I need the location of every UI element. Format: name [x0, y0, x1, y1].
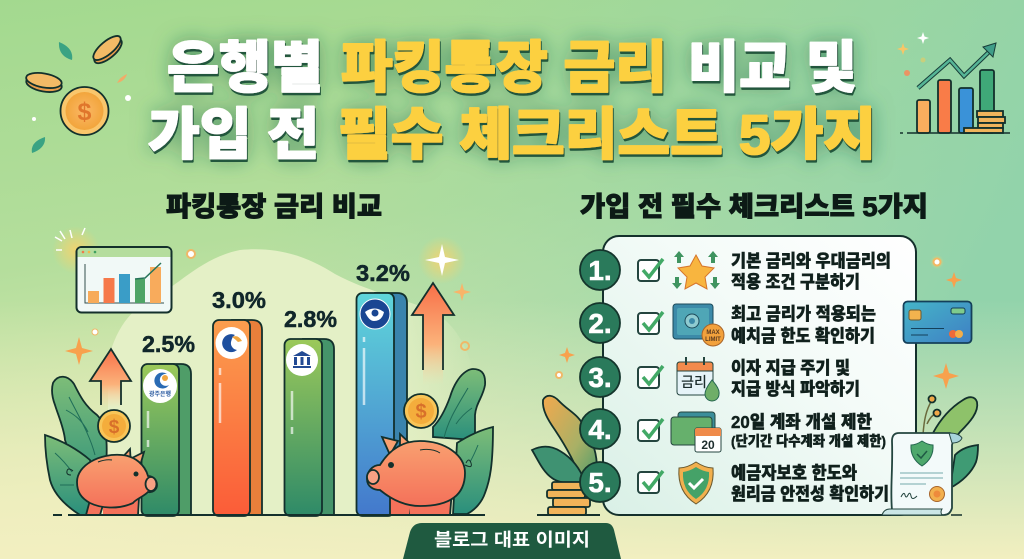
item 5: 예금자보호 한도와 [731, 463, 857, 483]
leaves left [45, 377, 107, 515]
background hill [108, 249, 480, 515]
coin right [404, 394, 438, 428]
title [148, 36, 876, 166]
item 3: 지급 방식 파악하기 [731, 379, 860, 399]
item 3: 금리 [681, 374, 707, 390]
title: 필수 체크리스트 5가지 [338, 103, 876, 166]
item 5: 원리금 안전성 확인하기 [731, 484, 889, 504]
item 4 [580, 409, 886, 452]
right sparkles [930, 255, 962, 515]
title: 파킹통장 금리 [341, 36, 667, 99]
item 2: 예치금 한도 확인하기 [731, 326, 875, 346]
bar 3.0%: 3.0% [212, 287, 266, 313]
item 1: 1. [588, 255, 612, 286]
piggy bank right [367, 434, 471, 515]
bar 2.5% [142, 331, 195, 516]
icon: rising chart [897, 32, 1010, 133]
bar 2.5%: 광주은행 [149, 390, 171, 398]
right heading: 가입 전 필수 체크리스트 5가지 [580, 192, 928, 222]
item 4: (단기간 다수계좌 개설 제한) [731, 433, 886, 449]
coin right: $ [415, 401, 427, 423]
title: 가입 전 [148, 103, 319, 166]
item 2: MAX [706, 330, 720, 336]
coin left: $ [109, 417, 120, 438]
item 4: 4. [588, 414, 612, 445]
bar 3.0% [212, 287, 266, 516]
plant right [923, 396, 978, 488]
item 4: 20 [701, 438, 715, 452]
bar 2.8%: 2.8% [284, 306, 337, 332]
panel: checklist [580, 236, 916, 515]
footer tag: 블로그 대표 이미지 [434, 530, 590, 550]
bar 2.8% [284, 306, 337, 516]
item 2 [580, 303, 876, 346]
item 4: 20일 계좌 개설 제한 [731, 412, 872, 432]
bar 3.2% [356, 260, 410, 516]
bar 3.2%: 3.2% [356, 260, 410, 286]
item 5: 5. [588, 467, 612, 498]
piggy bank left [67, 449, 157, 515]
coin left [98, 410, 130, 442]
arrow right [412, 283, 454, 385]
item 5 [580, 462, 889, 504]
item 2: LIMIT [705, 337, 721, 343]
item 3 [580, 357, 860, 401]
item 1 [580, 250, 891, 292]
left heading: 파킹통장 금리 비교 [166, 192, 382, 222]
leaves right [433, 369, 493, 514]
credit card [904, 302, 972, 343]
decorative plant and coins behind checklist [532, 347, 600, 515]
footer tag [403, 523, 621, 559]
item 3: 3. [588, 362, 612, 393]
baseline [53, 514, 485, 516]
certificate [882, 433, 962, 515]
icon: floating coins [25, 32, 131, 153]
title: 은행별 [167, 36, 323, 99]
item 3: 이자 지급 주기 및 [731, 358, 850, 378]
panel: bar chart [45, 226, 493, 516]
chart window [76, 247, 172, 312]
arrow left [90, 349, 131, 408]
item 2: 최고 금리가 적용되는 [731, 304, 876, 324]
title: 비교 및 [688, 36, 857, 99]
item 1: 기본 금리와 우대금리의 [731, 251, 891, 271]
bar 2.5%: 2.5% [142, 331, 195, 357]
item 1: 적용 조건 구분하기 [731, 272, 860, 292]
icon: floating coins: $ [78, 98, 92, 126]
sparkles [52, 226, 471, 365]
item 2: 2. [588, 308, 612, 339]
